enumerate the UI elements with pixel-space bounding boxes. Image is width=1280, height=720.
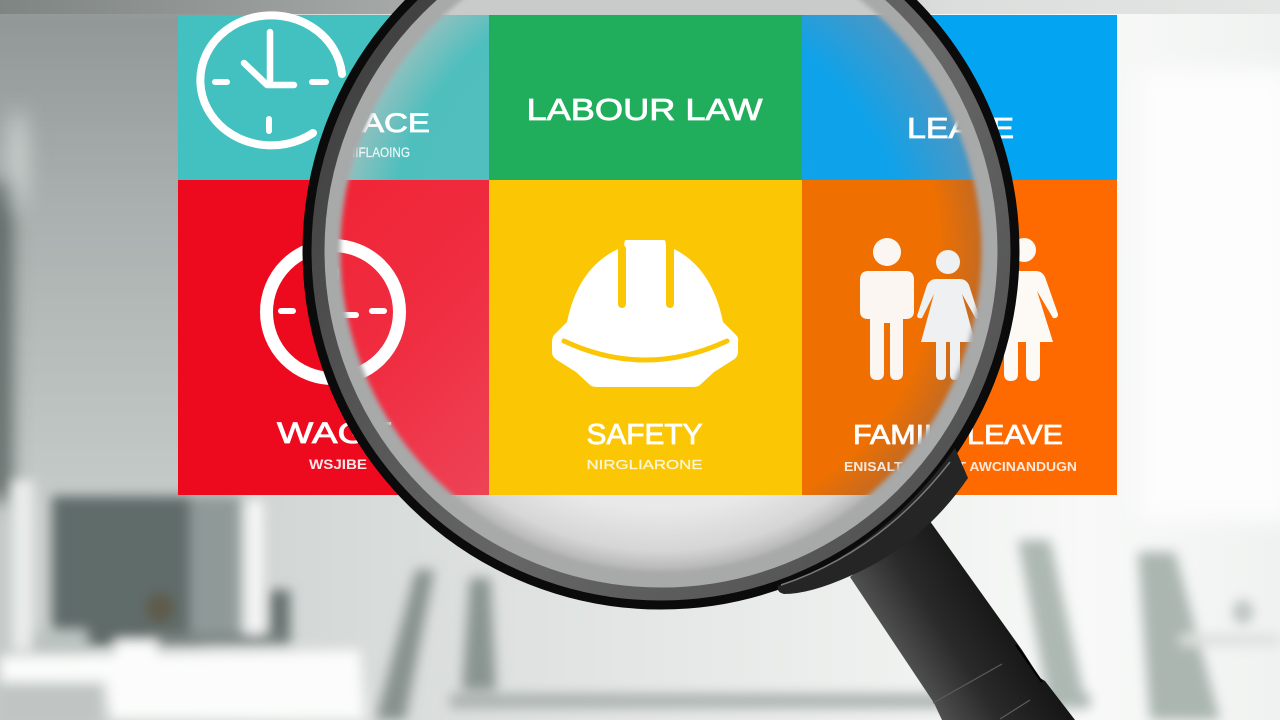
panel: labour law (green) [489,15,802,180]
heading: labour law: LABOUR LAW [526,92,763,127]
infographic panels [178,15,1117,495]
caption: safety: NIRGLIARONE [586,457,703,472]
panel caption: IIFLAOING [352,144,410,160]
panel: workplace hours (teal) [178,15,489,180]
panel heading: pace: ACE [362,108,430,138]
magnifying glass [307,0,1075,720]
handle [850,517,1075,720]
panel: safety (yellow) [489,180,802,495]
icon: man [860,238,914,380]
heading: leave: LEAVE [907,113,1014,145]
heading: family leave: FAMILY LEAVE [853,419,1063,450]
caption: wage: WSJIBE [309,456,367,472]
panel: wage (red) [178,180,489,495]
heading: safety: SAFETY [586,419,702,451]
icon: family figures [860,238,1058,381]
icon: woman [917,250,979,380]
caption: family leave: ENISALT BENEFIT AWCINANDUGN [844,459,1077,474]
heading: wage: WAGE [277,417,393,450]
icon: hard hat [552,240,738,387]
icon: second woman [995,238,1058,381]
panel: family leave (orange) [802,180,1117,495]
icon: wage clock [266,246,400,378]
lens glass [444,0,880,574]
handle flange [778,448,968,594]
lens rim [307,0,1015,605]
panel: leave (blue) [802,15,1117,180]
icon: clock [200,15,342,145]
